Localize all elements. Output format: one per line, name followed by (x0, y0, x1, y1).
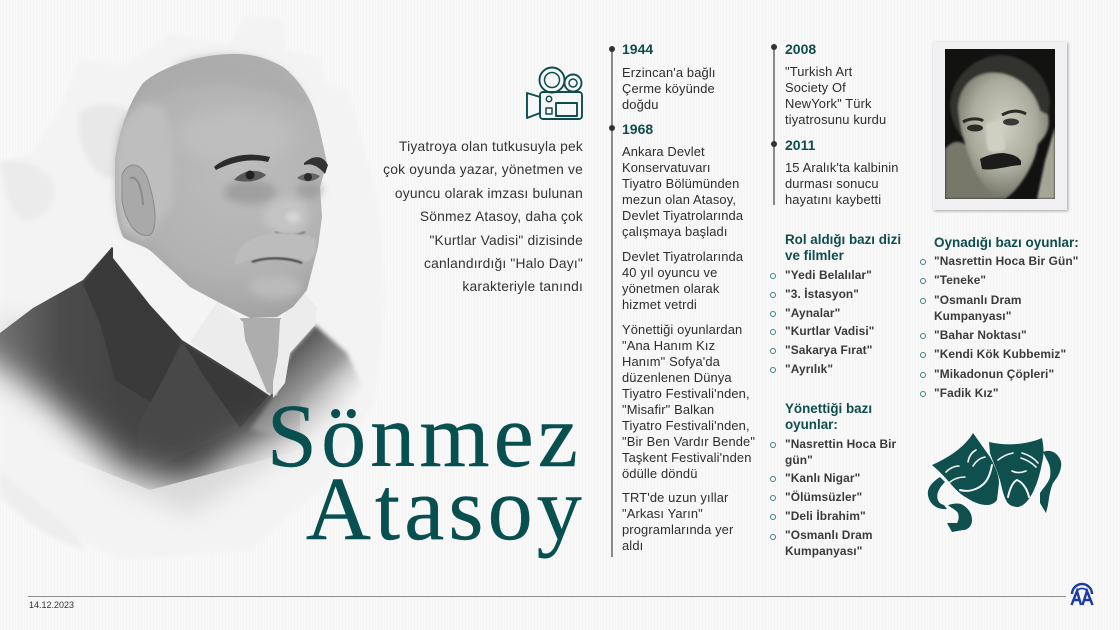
brows (214, 155, 270, 170)
list: directed plays: Yönettiği bazı (785, 401, 872, 416)
list: films: Rol aldığı bazı dizi (785, 232, 901, 247)
nose (262, 198, 308, 234)
intro text (383, 139, 583, 294)
timeline 1: Çerme köyünde (622, 81, 715, 96)
timeline 2: 15 Aralık'ta kalbinin (785, 160, 899, 175)
timeline 2: durması sonucu (785, 176, 879, 191)
list: acted plays: Kumpanyası" (934, 308, 1011, 322)
timeline 1: Erzincan'a bağlı (622, 65, 716, 80)
list: directed plays: "Deli İbrahim" (785, 509, 866, 523)
title: Sönmez (267, 387, 582, 486)
title (267, 387, 586, 559)
framed photo (933, 42, 1067, 210)
timeline 1: Tiyatro Bölümünden (622, 176, 739, 191)
list: acted plays: "Mikadonun Çöpleri" (934, 367, 1054, 381)
timeline 1: Tiyatro Festivali'nden, (622, 386, 750, 401)
timeline 2: "Turkish Art (785, 64, 852, 79)
timeline 1: Hanım" Sofya'da (622, 354, 720, 369)
right shoulder (250, 325, 362, 440)
list: films (770, 232, 901, 376)
timeline 1: 1944 (622, 41, 653, 57)
icon: film camera (526, 66, 583, 120)
list: directed plays: gün" (785, 452, 813, 466)
watercolor background (0, 15, 385, 560)
timeline 2: Society Of (785, 80, 846, 95)
intro text: çok oyunda yazar, yönetmen ve (383, 162, 583, 177)
list: films: "Kurtlar Vadisi" (785, 324, 875, 338)
icon: theatre masks (928, 433, 1062, 532)
title: Atasoy (306, 460, 586, 559)
timeline 1: 1968 (622, 121, 653, 137)
list: films: ve filmler (785, 248, 844, 263)
timeline 1: TRT'de uzun yıllar (622, 490, 728, 505)
list: acted plays: "Bahar Noktası" (934, 328, 1027, 342)
list: directed plays: "Nasrettin Hoca Bir (785, 437, 896, 451)
timeline 2: 2011 (785, 137, 815, 153)
timeline 1: "Arkası Yarın" (622, 506, 703, 521)
neck and collar (113, 237, 317, 398)
timeline 2: 2008 (785, 41, 816, 57)
head shading (115, 103, 174, 240)
timeline 1: çalışmaya başladı (622, 224, 728, 239)
timeline 1: Devlet Tiyatrolarında (622, 249, 743, 264)
intro text: "Kurtlar Vadisi" dizisinde (429, 233, 583, 248)
list: films: "Yedi Belalılar" (785, 268, 872, 282)
grey fog below jacket (0, 320, 340, 515)
timeline 1: ödülle döndü (622, 466, 698, 481)
intro text: oyuncu olarak imzası bulunan (395, 186, 583, 201)
timeline 1: "Misafir" Balkan (622, 402, 714, 417)
list: acted plays: "Osmanlı Dram (934, 293, 1022, 307)
timeline 1: Devlet Tiyatrolarında (622, 208, 743, 223)
list: films: "3. İstasyon" (785, 287, 859, 301)
list: directed plays: Kumpanyası" (785, 544, 862, 558)
logo: AA (1070, 582, 1094, 606)
list: acted plays: "Fadik Kız" (934, 386, 999, 400)
date: 14.12.2023 (29, 600, 74, 610)
list: acted plays: "Kendi Kök Kubbemiz" (934, 347, 1066, 361)
list: directed plays: "Kanlı Nigar" (785, 471, 860, 485)
timeline 1: Ankara Devlet (622, 144, 705, 159)
timeline 1: 40 yıl oyuncu ve (622, 265, 717, 280)
list: films: "Sakarya Fırat" (785, 343, 872, 357)
list: acted plays: "Teneke" (934, 273, 986, 287)
timeline 1: Yönettiği oyunlardan (622, 322, 742, 337)
timeline 1: programlarında yer (622, 522, 733, 537)
list: directed plays: "Ölümsüzler" (785, 490, 862, 504)
list: acted plays: "Nasrettin Hoca Bir Gün" (934, 254, 1078, 268)
list: acted plays (920, 235, 1079, 400)
timeline 1: Konservatuvarı (622, 160, 711, 175)
portrait photo (0, 49, 362, 545)
timeline 2: hayatını kaybetti (785, 192, 881, 207)
eyes (224, 180, 276, 204)
list: directed plays: "Osmanlı Dram (785, 528, 873, 542)
timeline 1: düzenlenen Dünya (622, 370, 732, 385)
list: films: "Ayrılık" (785, 362, 833, 376)
timeline 1: Tiyatro Festivali'nden, (622, 418, 750, 433)
list: films: "Aynalar" (785, 306, 840, 320)
timeline 2: NewYork" Türk (785, 96, 872, 111)
jacket (0, 247, 300, 490)
intro text: Sönmez Atasoy, daha çok (420, 209, 583, 224)
list: acted plays: Oynadığı bazı oyunlar: (934, 235, 1079, 250)
timeline 1: mezun olan Atasoy, (622, 192, 736, 207)
footer rule (28, 596, 1066, 597)
timeline 1: doğdu (622, 97, 659, 112)
intro text: karakteriyle tanındı (462, 279, 583, 294)
ear (122, 165, 155, 235)
intro text: Tiyatroya olan tutkusuyla pek (399, 139, 583, 154)
timeline 1: yönetmen olarak (622, 281, 719, 296)
timeline 1: "Ana Hanım Kız (622, 338, 715, 353)
timeline 1: hizmet vetrdi (622, 297, 697, 312)
list: directed plays (770, 401, 896, 558)
moustache and mouth (235, 233, 316, 265)
timeline 1: Taşkent Festivali'nden (622, 450, 752, 465)
timeline 1: aldı (622, 538, 643, 553)
intro text: canlandırdığı "Halo Dayı" (424, 256, 583, 271)
timeline 1: "Bir Ben Vardır Bende" (622, 434, 755, 449)
timeline 1 (609, 41, 755, 557)
list: directed plays: oyunlar: (785, 417, 838, 432)
head (115, 54, 328, 318)
timeline 2: tiyatrosunu kurdu (785, 112, 886, 127)
timeline 2 (771, 41, 899, 207)
